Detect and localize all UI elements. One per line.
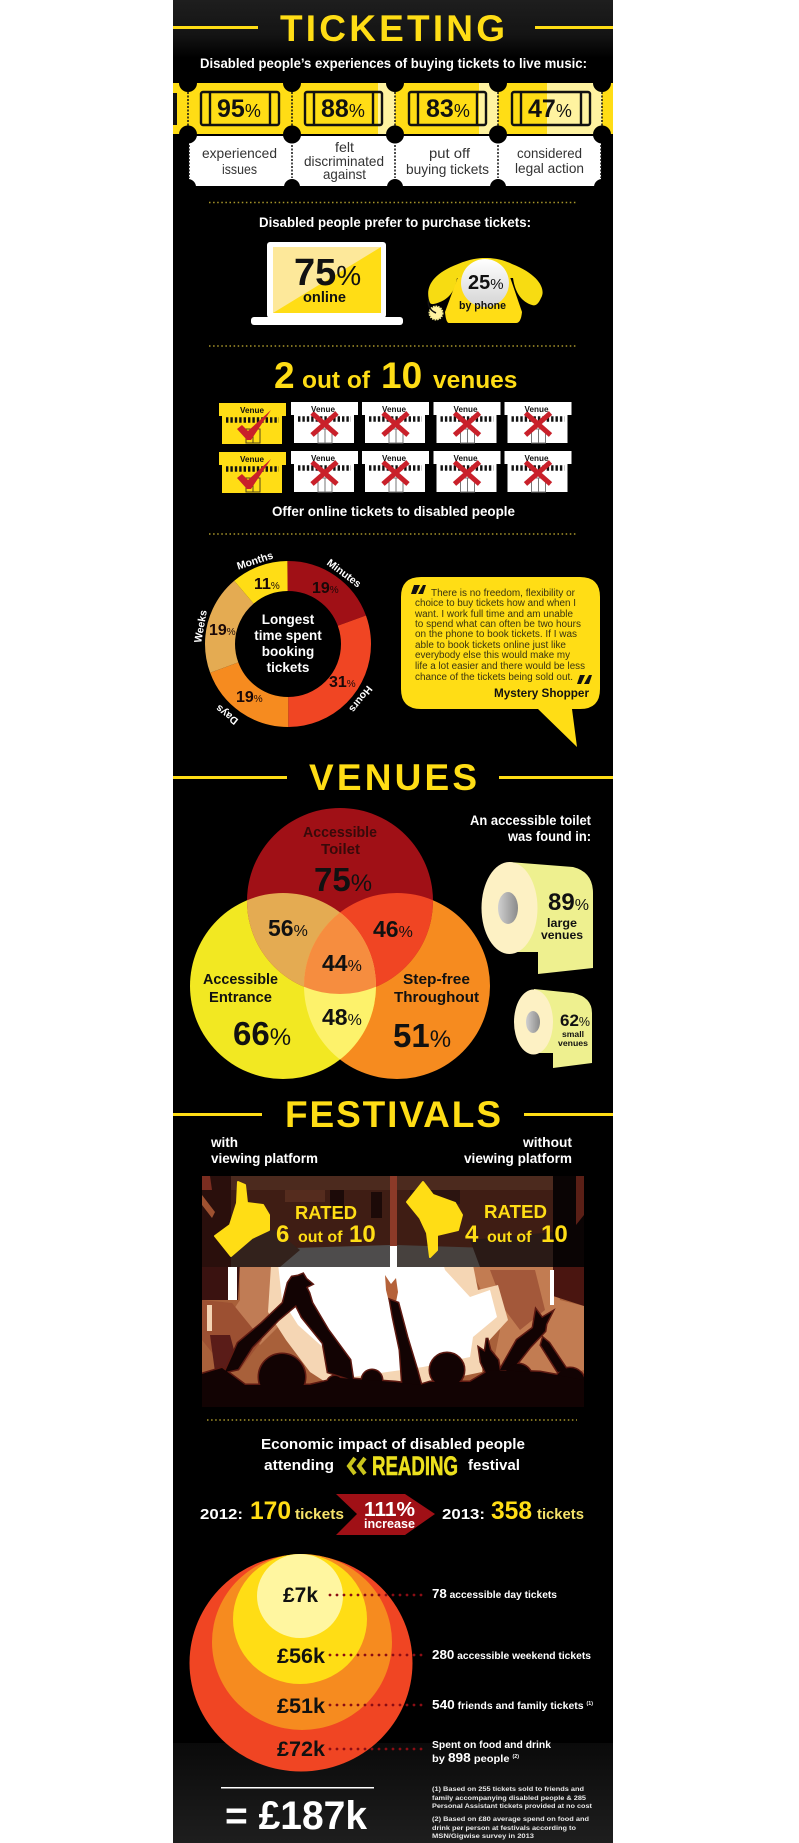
quote marks opening [411, 585, 426, 594]
icon: venue cross [504, 451, 572, 492]
icon: venue tick row 2: Venue [240, 454, 264, 464]
footnotes: (2) Based on £80 average spend on food and [432, 1816, 589, 1823]
page background panel [173, 0, 613, 1843]
caption: offer online tickets: Offer online tickets to disabled people [272, 503, 515, 519]
donut segment labels [192, 550, 374, 727]
quote text: want. I work full time and am unable [414, 609, 574, 620]
icon: venue cross: Venue [524, 453, 549, 463]
white ticket strip [189, 136, 601, 186]
quote text [414, 588, 585, 683]
yellow ticket strip [173, 83, 613, 134]
quote text: to spend what can often be two hours [415, 619, 581, 630]
rating: with platform: out of [298, 1229, 343, 1246]
quote text: life a lot easier and there would be less [415, 661, 585, 672]
label: considered legal action: considered [517, 145, 582, 161]
donut values: 11% [254, 576, 280, 593]
label: food and drink: Spent on food and drink [432, 1739, 551, 1751]
footnotes [432, 1786, 593, 1840]
quote text: choice to buy tickets how and when I [415, 598, 576, 609]
icon: venue cross [291, 451, 358, 492]
value: 46%: 46% [373, 916, 413, 942]
label: accessible toilet 75% [303, 824, 377, 898]
icon: small toilet roll 62%: 62% [560, 1011, 590, 1030]
logo: Reading festival: READING [372, 1451, 458, 1481]
quote marks closing [577, 675, 592, 684]
label: considered legal action: legal action [515, 160, 584, 176]
icon: laptop 75% online: online [303, 289, 346, 306]
icon: laptop 75% online: 75% [294, 252, 361, 294]
label: food and drink: by 898 people [432, 1750, 508, 1765]
value: 48%: 48% [322, 1004, 362, 1030]
stat: 2013 tickets [442, 1497, 584, 1525]
section heading: festivals [173, 1094, 613, 1135]
rating: without platform: out of [487, 1229, 532, 1246]
label: step-free throughout 51% [393, 971, 479, 1054]
section heading: ticketing [173, 8, 613, 49]
donut segment labels: Weeks [192, 609, 210, 644]
label: without viewing platform [464, 1135, 573, 1166]
label: put off buying tickets [406, 145, 489, 177]
label: with viewing platform [210, 1135, 318, 1166]
rating: with platform [276, 1203, 376, 1248]
label: experienced issues: issues [222, 161, 257, 177]
heading: 2 out of 10 venues: 2 [274, 355, 295, 396]
stat: 2013 tickets: tickets [537, 1506, 584, 1523]
donut centre text: Longest [262, 612, 315, 627]
bottom texture [173, 1743, 613, 1843]
donut values: 19% [236, 689, 263, 706]
icon: telephone 25% by phone: by phone [459, 300, 506, 312]
value: £7k: £7k [283, 1584, 318, 1607]
stat: 2012 tickets: 170 [250, 1497, 291, 1525]
concert crowd illustration [202, 1176, 585, 1407]
arrow: 111% increase: increase [364, 1517, 415, 1531]
icon: large toilet roll 89%: large [547, 918, 577, 930]
stat: 2012 tickets [200, 1497, 344, 1525]
stat: 2013 tickets: 358 [491, 1497, 532, 1525]
value: £51k: £51k [277, 1695, 325, 1718]
label: step-free throughout 51%: 51% [393, 1017, 451, 1054]
stat: 2012 tickets: tickets [295, 1506, 344, 1523]
icon: small toilet roll 62% [514, 989, 592, 1068]
venn diagram [190, 808, 490, 1079]
arrow: 111% increase: 111% [364, 1499, 415, 1521]
donut segment labels: Hours [346, 683, 374, 715]
heading: economic impact: attending [264, 1457, 334, 1474]
icon: thumbs up [215, 1182, 269, 1256]
subtitle: experiences: Disabled people’s experiences of buying tickets to live music: [200, 55, 587, 71]
donut segment labels: Minutes [324, 557, 363, 590]
icon: large toilet roll 89% [482, 862, 593, 974]
rating: with platform: 6 [276, 1221, 289, 1248]
ticket notches [179, 74, 611, 195]
icon: venue cross [434, 451, 500, 492]
label: considered legal action [515, 145, 584, 176]
icon: venue cross: Venue [524, 404, 549, 414]
icon: venue cross: Venue [382, 404, 406, 414]
rating: without platform [465, 1202, 568, 1248]
donut centre text: tickets [267, 660, 309, 675]
text: accessible toilet found in: was found in: [507, 829, 591, 844]
footnotes: drink per person at festivals according to [432, 1825, 576, 1832]
heading: economic impact: festival [468, 1457, 520, 1474]
label: felt discriminated against [304, 139, 384, 182]
rating: with platform: RATED [295, 1203, 357, 1223]
heading: purchase preference: Disabled people prefer to purchase tickets: [259, 214, 531, 230]
stage glow [278, 1267, 497, 1377]
nested circles chart: economic impact [190, 1554, 424, 1772]
stat: 95%: 95% [217, 95, 261, 123]
label: experienced issues: experienced [202, 145, 277, 161]
icon: large toilet roll 89%: venues [541, 930, 583, 942]
quote text: chance of the tickets being sold out. [415, 672, 573, 683]
heading: economic impact [261, 1436, 525, 1481]
label: accessible toilet 75%: 75% [314, 861, 372, 898]
icon: venue tick row 2 [219, 452, 286, 493]
raised hand lit [385, 1275, 398, 1302]
quote text: everybody else this would make my [415, 650, 570, 661]
rating: without platform: RATED [484, 1202, 547, 1222]
label: step-free throughout 51%: Step-free [403, 971, 470, 988]
icon: venue cross [362, 451, 429, 492]
icon: venue cross [434, 402, 500, 443]
label: without viewing platform: viewing platform [464, 1151, 572, 1166]
label: felt discriminated against: against [323, 166, 366, 182]
footnotes: family accompanying disabled people & 285 [432, 1795, 586, 1802]
label: accessible entrance 66%: 66% [233, 1015, 291, 1052]
label: accessible entrance 66% [203, 971, 291, 1052]
rating: without platform: 10 [541, 1221, 568, 1248]
icon: venue cross: Venue [311, 404, 335, 414]
icon: venue tick row 1 [219, 403, 286, 444]
attribution: Mystery Shopper [494, 686, 589, 700]
icon: venue cross [362, 402, 429, 443]
label: with viewing platform: with [210, 1135, 238, 1150]
label: accessible toilet 75%: Toilet [321, 841, 360, 858]
stat: 47%: 47% [528, 95, 572, 123]
crowd silhouette [202, 1274, 585, 1407]
donut centre text: booking [262, 644, 314, 659]
donut values: 31% [329, 674, 356, 691]
icon: thumbs down [407, 1182, 462, 1257]
total: £187k: = £187k [225, 1794, 368, 1838]
quote text: on the phone to book tickets. If I was [415, 629, 577, 640]
icon: venue tick row 1: Venue [240, 405, 264, 415]
donut chart: longest time spent booking [192, 550, 374, 727]
donut values: 19% [312, 580, 339, 597]
rating: without platform: 4 [465, 1221, 479, 1248]
icon: small toilet roll 62%: small [562, 1030, 584, 1039]
icon: venue cross: Venue [454, 453, 478, 463]
value: 44%: 44% [322, 950, 362, 976]
icon: venue cross [291, 402, 358, 443]
icon: venue cross: Venue [382, 453, 406, 463]
heading: 2 out of 10 venues: 10 [381, 355, 422, 396]
panel: ticket statistics [173, 74, 613, 195]
text: accessible toilet found in: An accessible toilet [470, 813, 591, 828]
arrow: 111% increase [336, 1494, 435, 1535]
panel: venue icons [219, 402, 572, 493]
label: food and drink: (2) [513, 1754, 519, 1760]
footnotes: Personal Assistant tickets provided at no cost [432, 1803, 593, 1810]
label: with viewing platform: viewing platform [211, 1151, 318, 1166]
footnotes: (1) Based on 255 tickets sold to friends and [432, 1786, 584, 1793]
top texture [173, 0, 613, 58]
label: felt discriminated against: felt [335, 139, 354, 155]
quote text: There is no freedom, flexibility or [431, 588, 576, 599]
donut centre text: time spent [254, 628, 322, 643]
stage glow halo [268, 1267, 508, 1383]
label: accessible entrance 66%: Accessible [203, 971, 278, 988]
footnotes: MSN/Gigwise survey in 2013 [432, 1833, 534, 1840]
icon: venue cross: Venue [311, 453, 335, 463]
label: step-free throughout 51%: Throughout [394, 989, 479, 1006]
stat: 83%: 83% [426, 95, 470, 123]
heading: 2 out of 10 venues: out of [302, 367, 371, 394]
stat: 2013 tickets: 2013: [442, 1506, 485, 1523]
donut segment labels: Months [235, 550, 275, 573]
label: accessible day tickets: 78 accessible day tickets [432, 1586, 557, 1601]
icon: venue cross [504, 402, 572, 443]
callout: mystery shopper quote [401, 577, 600, 747]
icon: large toilet roll 89%: 89% [548, 889, 589, 916]
label: accessible entrance 66%: Entrance [209, 989, 272, 1006]
section heading: venues: VENUES [309, 757, 477, 798]
logo: Reading festival [349, 1451, 458, 1481]
icon: telephone 25% by phone [428, 258, 543, 323]
section heading: festivals: FESTIVALS [285, 1094, 501, 1135]
section heading: ticketing: TICKETING [280, 8, 505, 49]
value: £72k: £72k [277, 1738, 325, 1761]
section heading: venues [173, 757, 613, 798]
heading: 2 out of 10 venues: venues [433, 367, 517, 394]
donut values: 19% [209, 622, 236, 639]
label: friends and family tickets: 540 friends and family tickets [432, 1697, 578, 1712]
label: accessible weekend tickets: 280 accessible weekend tickets [432, 1647, 591, 1662]
icon: venue cross: Venue [454, 404, 478, 414]
crowd edge glow [202, 1272, 584, 1385]
text: accessible toilet found in [470, 813, 591, 844]
label: accessible toilet 75%: Accessible [303, 824, 377, 841]
value: 56%: 56% [268, 915, 308, 941]
label: food and drink [432, 1739, 551, 1765]
icon: telephone 25% by phone: 25% [468, 272, 504, 294]
label: felt discriminated against: discriminated [304, 153, 384, 169]
label: friends and family tickets: (1) [587, 1701, 593, 1707]
donut centre text [254, 612, 322, 675]
donut segment labels: Days [213, 702, 241, 727]
heading: economic impact: Economic impact of disabled people [261, 1436, 525, 1453]
label: put off buying tickets: put off [429, 145, 470, 161]
stat: 2012 tickets: 2012: [200, 1506, 243, 1523]
label: experienced issues [202, 145, 277, 177]
icon: small toilet roll 62%: venues [558, 1039, 589, 1048]
value: £56k: £56k [277, 1645, 325, 1668]
dark rigging band [202, 1176, 584, 1271]
rating: with platform: 10 [349, 1221, 376, 1248]
label: without viewing platform: without [522, 1135, 573, 1150]
icon: laptop 75% online [251, 242, 403, 325]
stat: 88%: 88% [321, 95, 365, 123]
quote text: able to book tickets online just like [415, 640, 567, 651]
label: put off buying tickets: buying tickets [406, 161, 489, 177]
donut values [209, 576, 356, 706]
